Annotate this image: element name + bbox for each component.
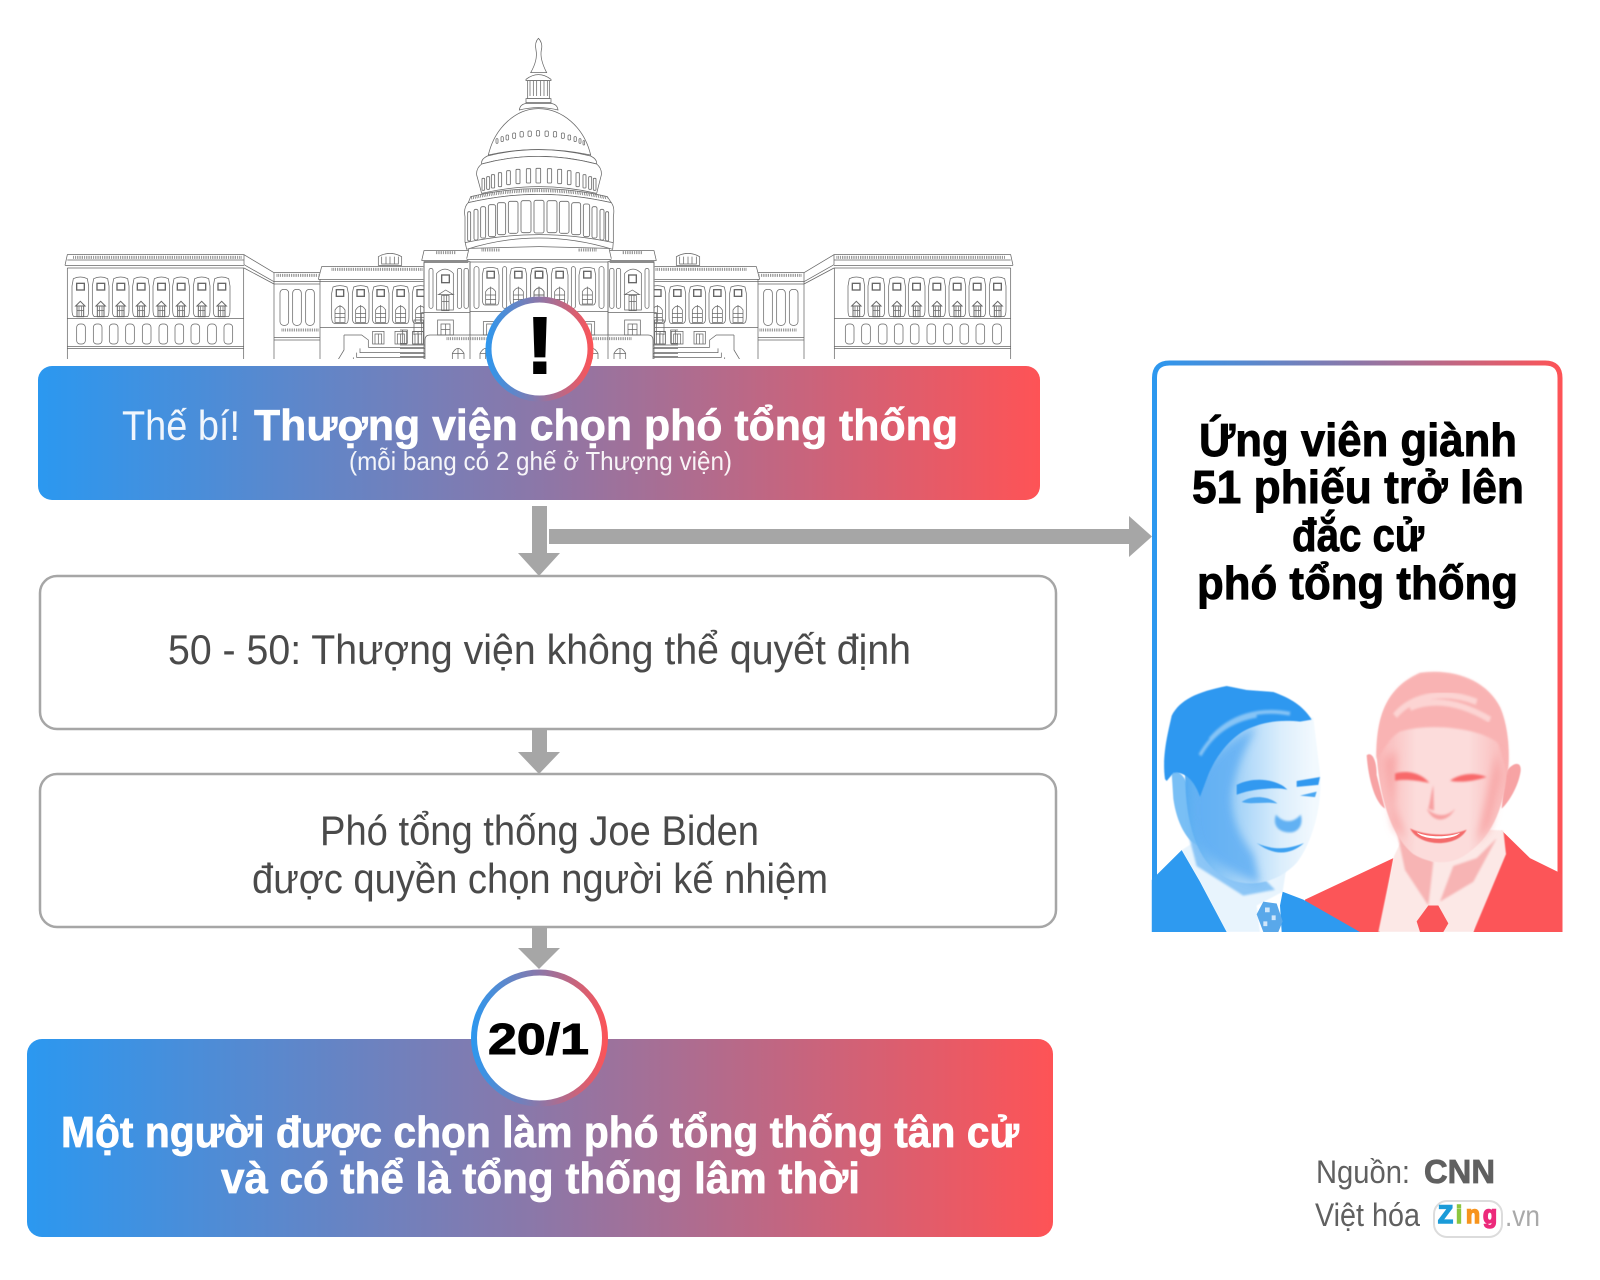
dome of the Capitol	[465, 38, 614, 249]
panel heading: phó tổng thống	[1197, 557, 1518, 609]
banner: outcome	[27, 1039, 1053, 1237]
source credit: CNN	[1424, 1153, 1495, 1190]
icon: exclamation badge: !	[527, 301, 553, 390]
logo: Zing.vn: .vn	[1505, 1200, 1540, 1233]
subheading: (mỗi bang có 2 ghế ở Thượng viện)	[349, 446, 732, 476]
box: Joe Biden chooses: Phó tổng thống Joe Biden	[320, 807, 759, 854]
box: Joe Biden chooses	[40, 774, 1056, 927]
panel heading	[1192, 414, 1524, 609]
panel heading: Ứng viên giành	[1199, 414, 1517, 466]
badge: date 20/1: 20/1	[488, 1015, 589, 1064]
portrait: blue candidate	[1152, 686, 1360, 932]
logo: Zing.vn	[1434, 1200, 1540, 1237]
box: 50-50 tie: 50 - 50: Thượng viện không thể quyết định	[168, 626, 911, 673]
illustration: US Capitol building	[65, 38, 1013, 359]
arrow: down from banner to tie box	[518, 506, 560, 576]
arrow: down to Biden box	[518, 729, 560, 774]
heading: light lead-in: Thế bí!	[122, 402, 240, 449]
portraits of the two candidates	[1152, 672, 1562, 932]
panel heading: 51 phiếu trở lên	[1192, 461, 1524, 513]
box: Joe Biden chooses: được quyền chọn người kế nhiệm	[252, 855, 828, 902]
logo: Zing.vn: n	[1466, 1201, 1480, 1229]
logo: Zing.vn: Z	[1438, 1201, 1453, 1229]
arrow: right to winner panel	[549, 516, 1152, 557]
logo: Zing.vn: g	[1483, 1201, 1497, 1229]
panel: winner with 51 votes	[1152, 363, 1562, 932]
box: 50-50 tie	[40, 576, 1056, 729]
source credit: Nguồn:	[1316, 1154, 1410, 1190]
banner: Senate picks vice president	[38, 366, 1040, 500]
arrow: down to date badge	[518, 927, 560, 969]
source credit	[1315, 1153, 1540, 1237]
logo: Zing.vn: i	[1456, 1201, 1462, 1229]
panel heading: đắc cử	[1292, 509, 1425, 561]
heading: bold title: Thượng viện chọn phó tổng thống	[254, 401, 958, 450]
portrait: red candidate	[1305, 672, 1562, 932]
banner: outcome: Một người được chọn làm phó tổng thống tân cử	[61, 1108, 1019, 1157]
icon: exclamation badge	[488, 300, 590, 398]
badge: date 20/1	[474, 972, 605, 1104]
source credit: Việt hóa	[1315, 1197, 1420, 1233]
banner: outcome: và có thể là tổng thống lâm thời	[221, 1154, 860, 1203]
